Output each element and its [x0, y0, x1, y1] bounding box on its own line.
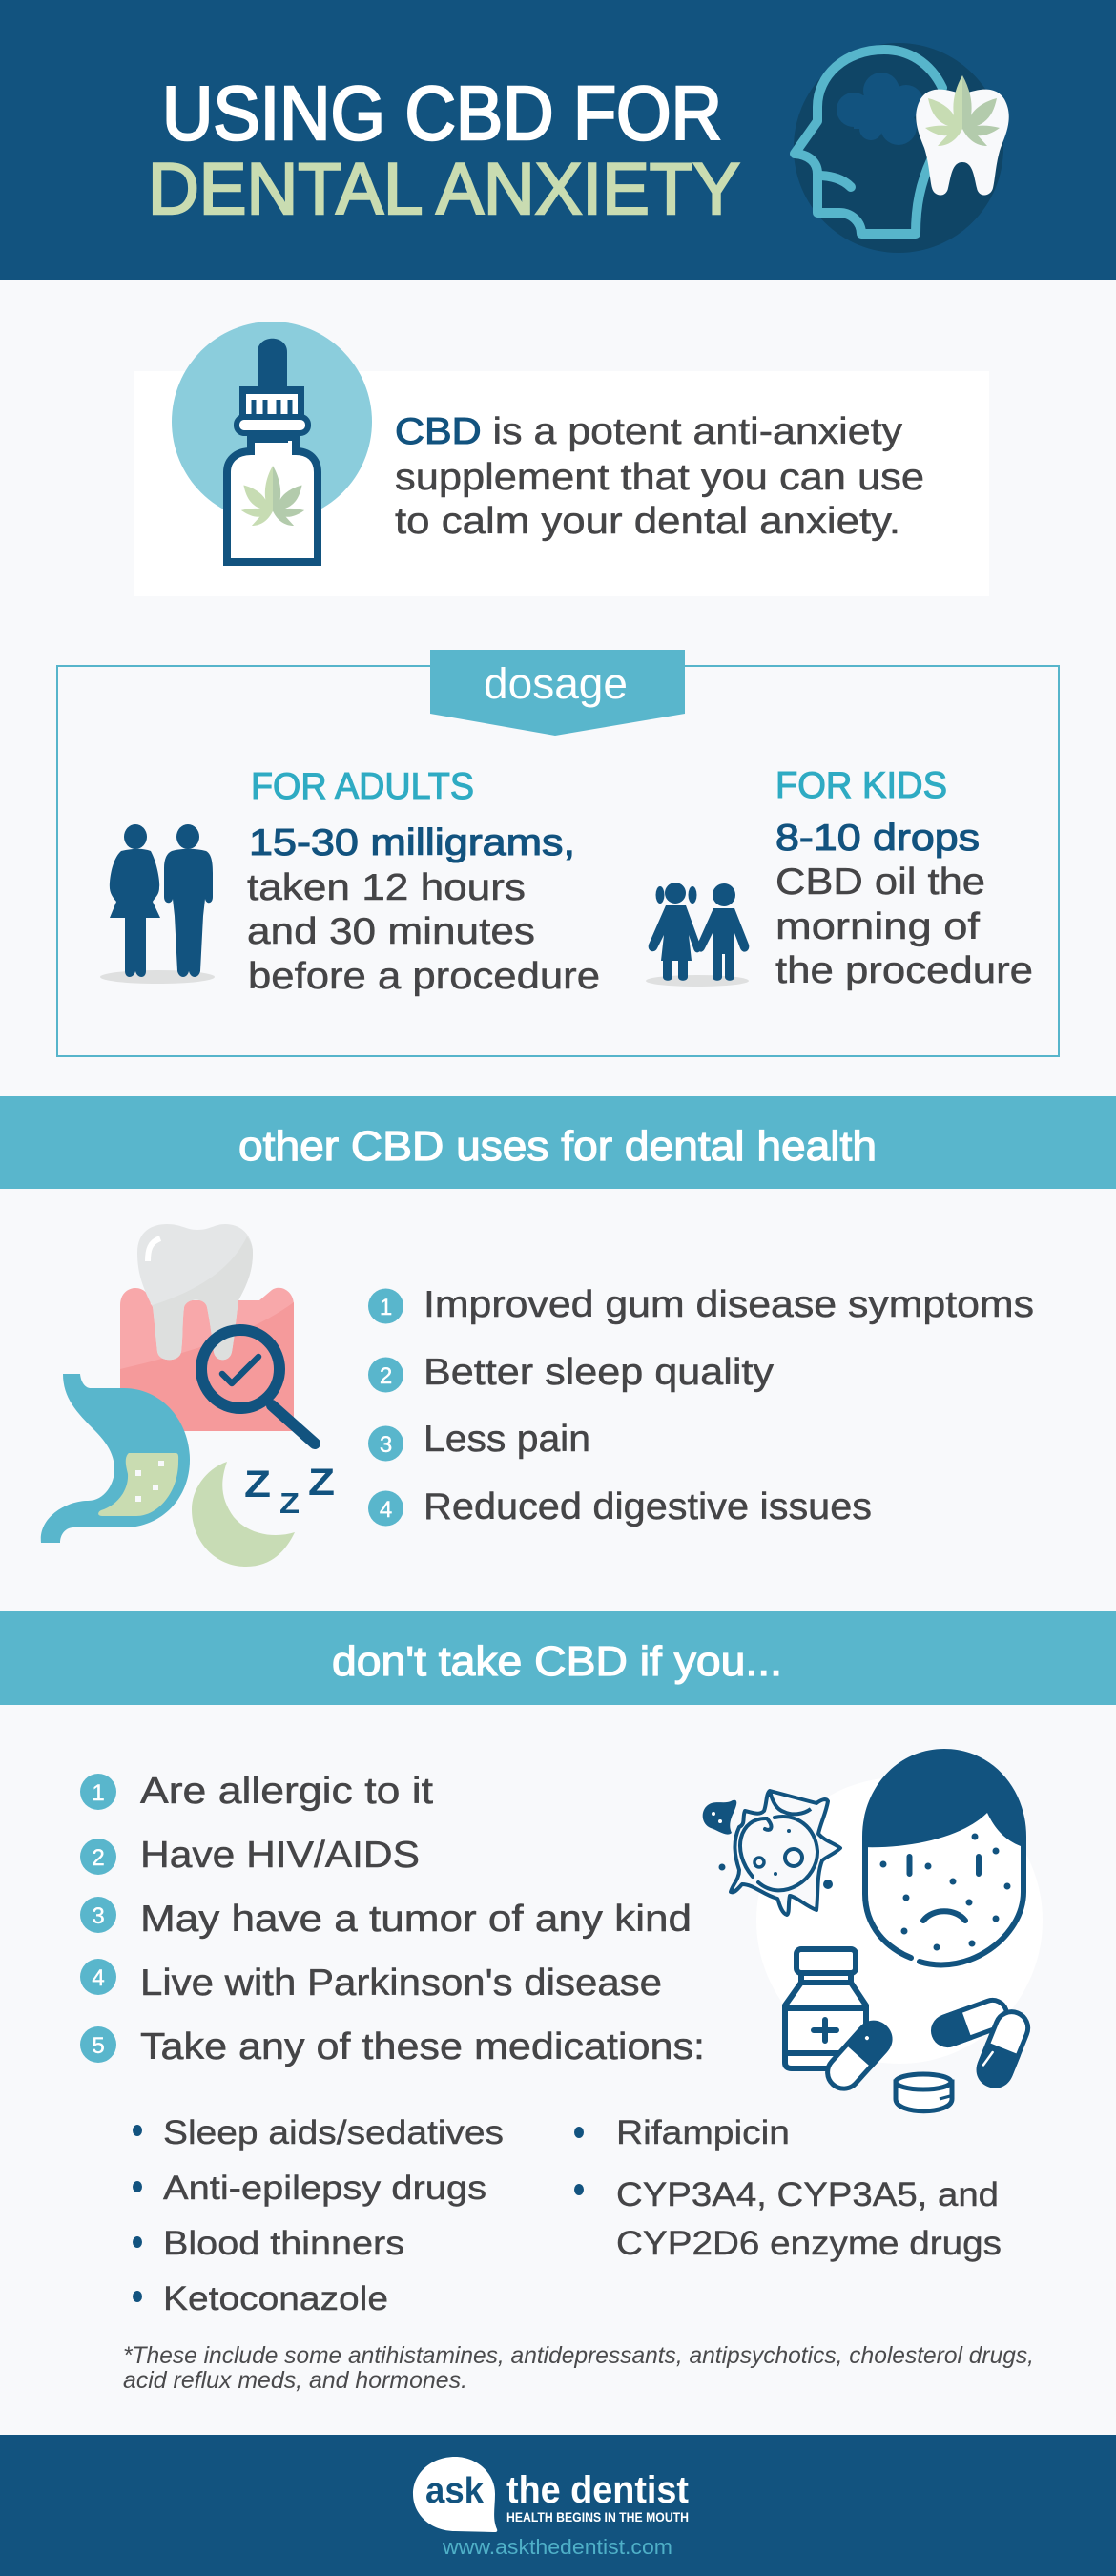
icon: zzz: Z	[279, 1486, 300, 1520]
numbered list: contraindications	[80, 1771, 705, 2067]
kids dosage text: morning of	[775, 906, 980, 947]
medications list: Blood thinners	[163, 2225, 404, 2262]
numbered list: uses: 1	[380, 1295, 392, 1320]
adults dosage text	[247, 766, 600, 997]
intro text: to calm your dental anxiety.	[395, 501, 900, 542]
icon: capsule two	[927, 1994, 1012, 2051]
icon: virus	[703, 1791, 840, 1915]
numbered list: uses: Better sleep quality	[424, 1352, 775, 1393]
medications list: Rifampicin	[616, 2114, 790, 2151]
illustration: tooth, magnifier, stomach, moon	[41, 1224, 335, 1567]
icon: tablet	[896, 2074, 952, 2111]
website url: www.askthedentist.com	[442, 2535, 672, 2559]
heading bar: do not take	[0, 1611, 1116, 1705]
panel: intro	[134, 322, 989, 596]
icon: zzz: Z	[244, 1464, 271, 1506]
logo: ask the dentist: the dentist	[506, 2469, 689, 2511]
header panel	[0, 0, 1116, 280]
medications list: Ketoconazole	[163, 2280, 388, 2317]
title	[148, 71, 740, 230]
banner: dosage	[430, 650, 685, 736]
medications list: CYP2D6 enzyme drugs	[616, 2225, 1002, 2262]
numbered list: contraindications: Have HIV/AIDS	[140, 1835, 420, 1876]
numbered list: contraindications: Are allergic to it	[140, 1771, 433, 1812]
intro text: CBD is a potent anti-anxiety	[395, 411, 903, 452]
logo: ask the dentist	[413, 2457, 689, 2532]
adults dosage text: 15-30 milligrams,	[249, 822, 575, 863]
numbered list: contraindications: 1	[92, 1780, 105, 1806]
banner: dosage: dosage	[484, 659, 628, 708]
icon: capsule one	[819, 2013, 899, 2097]
numbered list: contraindications: 3	[92, 1903, 105, 1929]
adults dosage text: taken 12 hours	[247, 867, 526, 908]
numbered list: uses: 4	[380, 1497, 392, 1523]
numbered list: contraindications: May have a tumor of any kind	[140, 1899, 692, 1940]
heading bar: other CBD uses	[0, 1096, 1116, 1189]
medications list: Sleep aids/sedatives	[163, 2114, 504, 2151]
panel: dosage	[57, 650, 1059, 1056]
numbered list: uses: 2	[380, 1363, 392, 1389]
footnote: *These include some antihistamines, antidepressants, antipsychotics, cholesterol drugs,	[123, 2342, 1034, 2369]
icon: head with tooth and leaf	[794, 43, 1009, 253]
numbered list: contraindications: 2	[92, 1845, 105, 1871]
numbered list: contraindications: 5	[92, 2033, 105, 2059]
title: USING CBD FOR	[162, 71, 722, 156]
kids dosage text: the procedure	[775, 950, 1033, 991]
intro text	[395, 411, 924, 542]
numbered list: uses: 3	[380, 1432, 392, 1458]
heading bar: do not take: don't take CBD if you...	[332, 1638, 782, 1685]
numbered list: contraindications: Live with Parkinson's disease	[140, 1963, 662, 2004]
numbered list: uses	[368, 1284, 1034, 1527]
footnote	[123, 2342, 1034, 2394]
kids dosage text: 8-10 drops	[775, 818, 980, 859]
icon: capsule three	[971, 2006, 1035, 2093]
icon: medicine bottle	[785, 1949, 866, 2068]
numbered list: contraindications: Take any of these medications:	[140, 2026, 705, 2067]
icon: leaf on bottle	[241, 466, 304, 526]
icon: CBD dropper bottle	[172, 322, 372, 562]
medications list	[133, 2114, 1002, 2317]
icon: adults	[100, 824, 215, 984]
numbered list: uses: Improved gum disease symptoms	[424, 1284, 1034, 1325]
icon: zzz	[244, 1462, 335, 1520]
title: DENTAL ANXIETY	[148, 149, 740, 230]
numbered list: uses: Reduced digestive issues	[424, 1486, 872, 1527]
icon: stomach	[41, 1374, 190, 1543]
illustration: sick face, virus, medications	[703, 1749, 1043, 2111]
medications list: Anti-epilepsy drugs	[163, 2170, 486, 2207]
icon: zzz: Z	[308, 1462, 335, 1504]
adults dosage text: FOR ADULTS	[251, 766, 474, 807]
logo: ask the dentist: HEALTH BEGINS IN THE MOUTH	[506, 2509, 689, 2524]
intro text: supplement that you can use	[395, 457, 924, 498]
adults dosage text: before a procedure	[248, 956, 600, 997]
icon: kids	[646, 883, 749, 987]
adults dosage text: and 30 minutes	[247, 911, 535, 952]
icon: moon	[192, 1462, 295, 1567]
icon: sick face	[862, 1749, 1026, 1964]
kids dosage text: CBD oil the	[775, 862, 985, 903]
kids dosage text	[775, 765, 1033, 991]
logo: ask the dentist: ask	[425, 2471, 485, 2511]
kids dosage text: FOR KIDS	[775, 765, 947, 806]
medications list: CYP3A4, CYP3A5, and	[616, 2176, 999, 2213]
numbered list: contraindications: 4	[92, 1965, 105, 1991]
footnote: acid reflux meds, and hormones.	[123, 2367, 467, 2394]
heading bar: other CBD uses: other CBD uses for dental health	[238, 1123, 877, 1170]
footer panel	[0, 2435, 1116, 2576]
numbered list: uses: Less pain	[424, 1419, 590, 1460]
icon: magnifier with check	[201, 1330, 315, 1444]
